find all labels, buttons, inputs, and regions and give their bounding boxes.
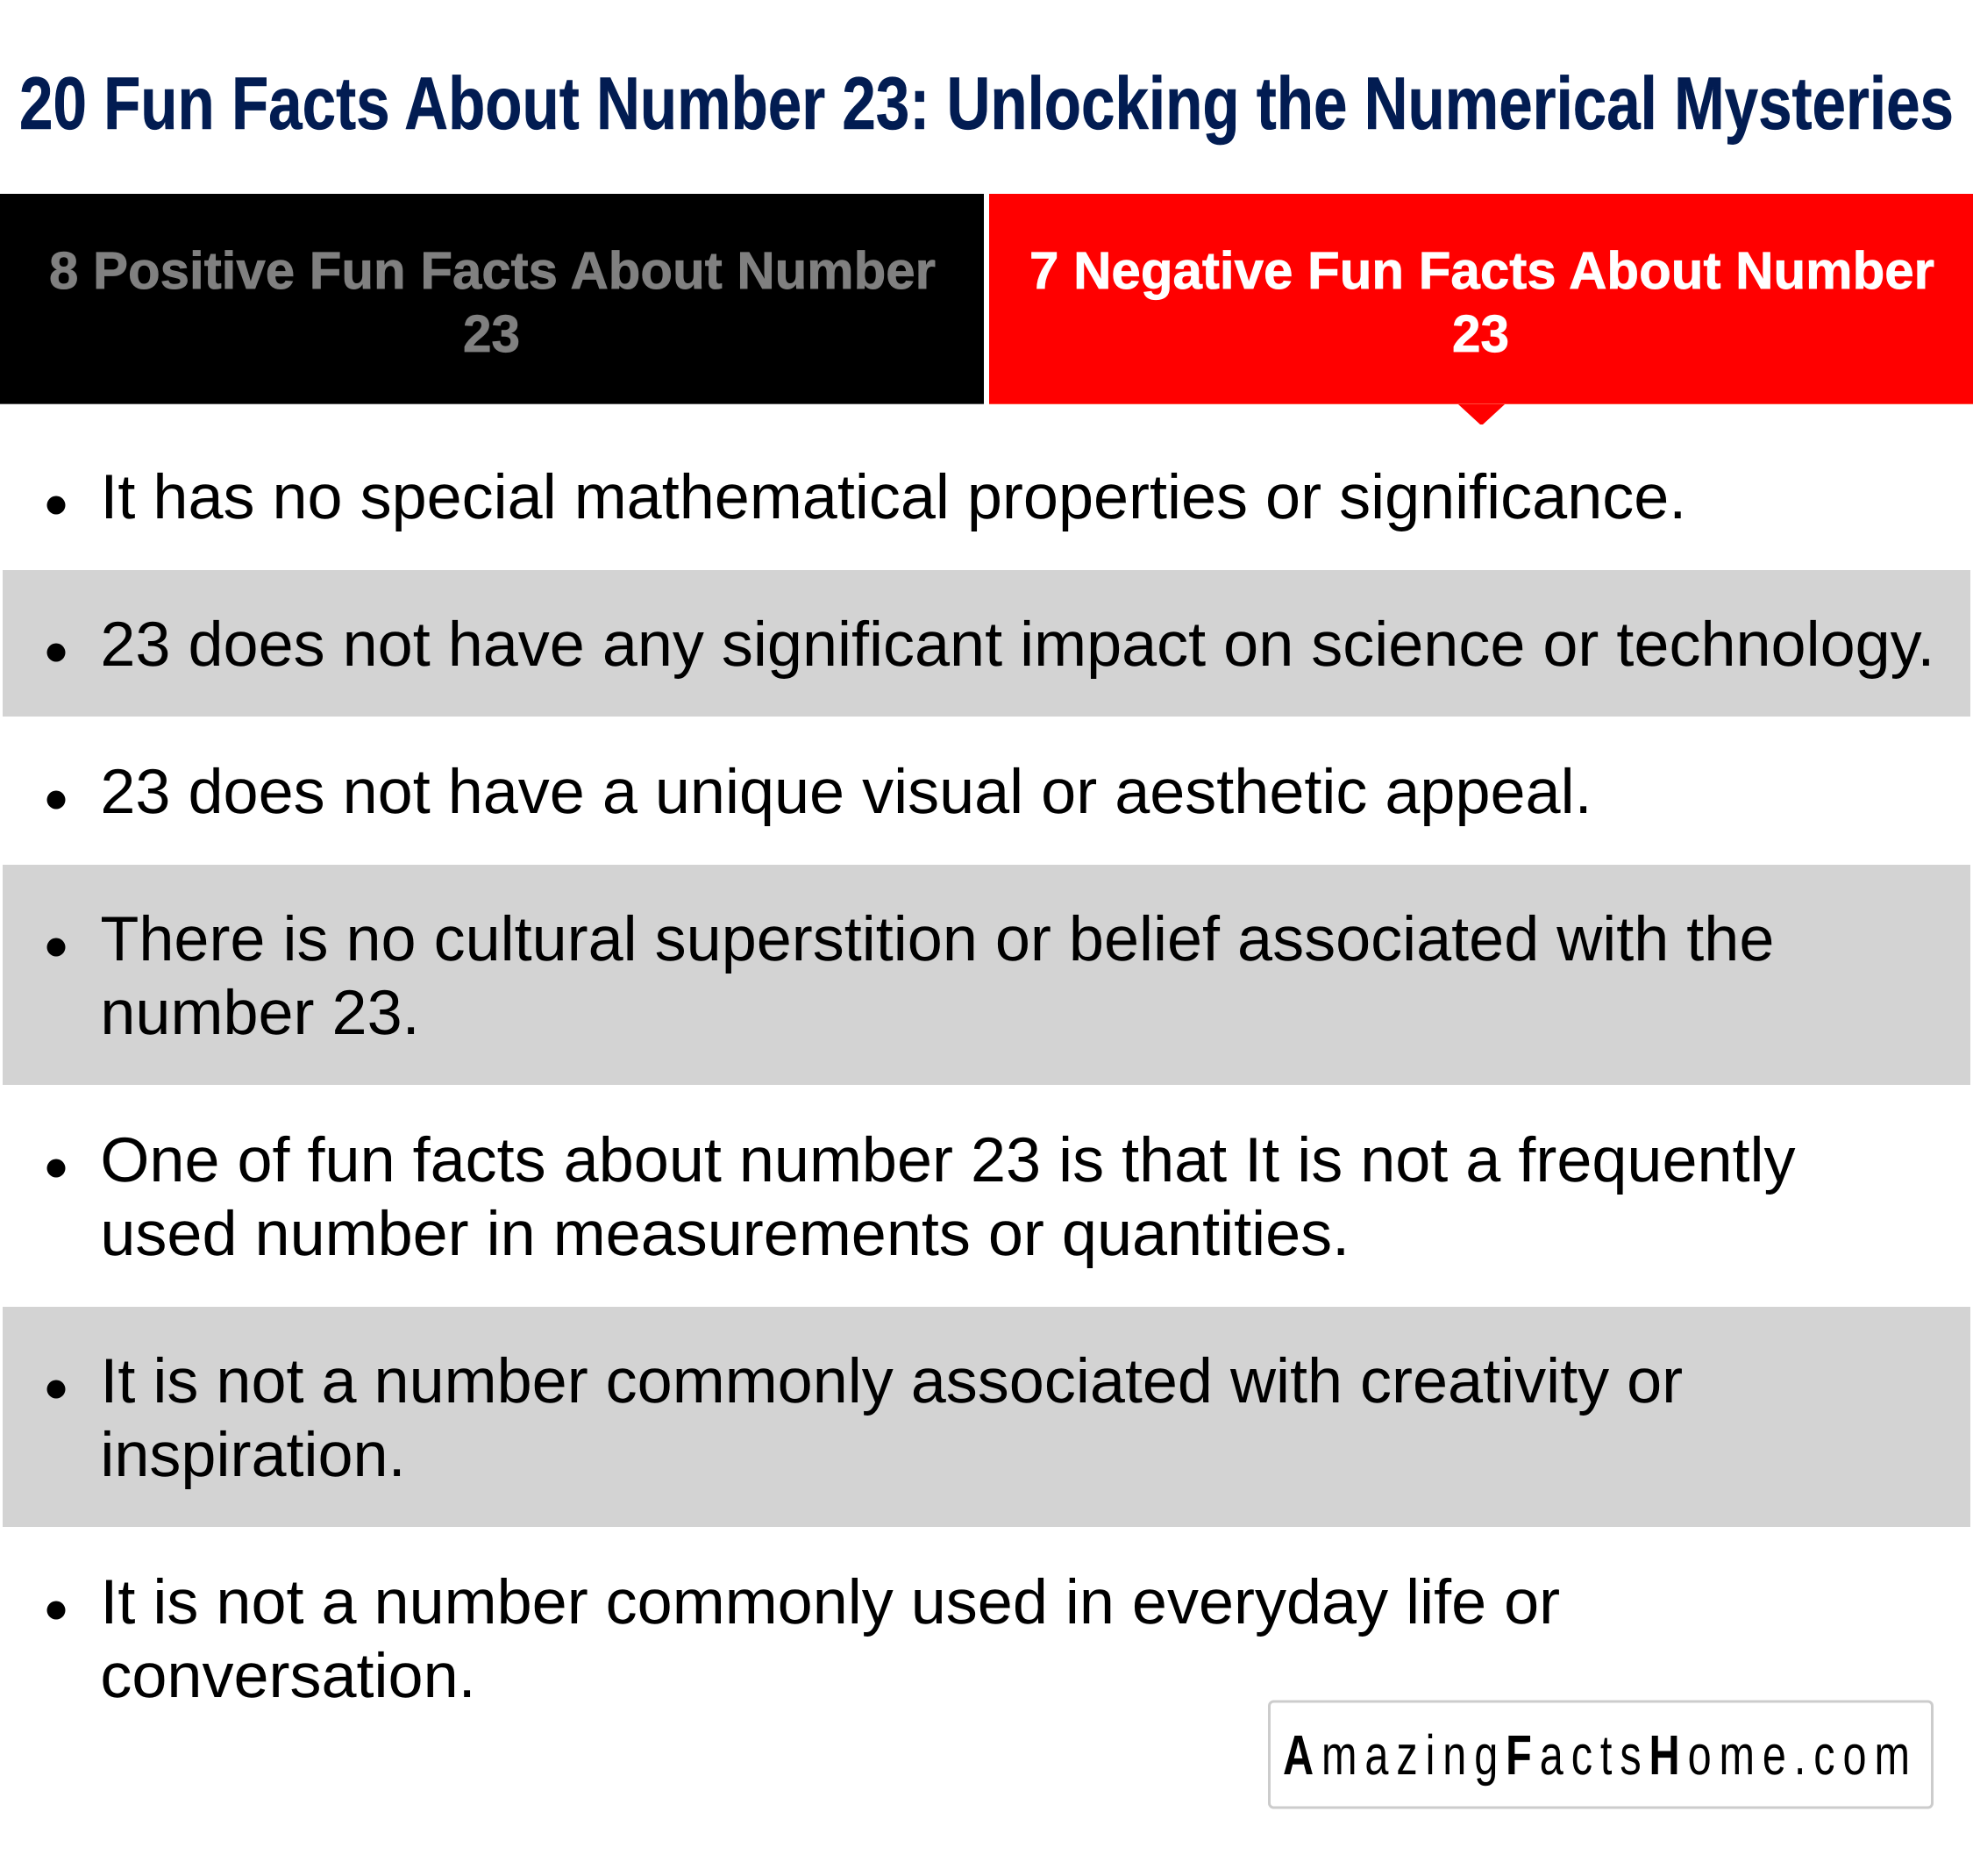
- row 2: 23 does not have any significant impact on science or technology.: [100, 610, 1934, 680]
- row 7: [47, 1567, 1560, 1711]
- row 5: One of fun facts about number 23 is that It is not a frequently: [100, 1125, 1796, 1195]
- row 6: It is not a number commonly associated with creativity or: [100, 1346, 1683, 1416]
- tab: positive facts: 8 Positive Fun Facts About Number: [49, 241, 936, 300]
- tab: positive facts: [0, 194, 984, 404]
- row 5: used number in measurements or quantities.: [100, 1199, 1350, 1269]
- row 4: There is no cultural superstition or belief associated with the: [100, 904, 1774, 974]
- tab: negative facts (active): 23: [1452, 304, 1509, 363]
- logo badge: [1270, 1701, 1933, 1808]
- row 7: conversation.: [100, 1641, 476, 1711]
- row 1: It has no special mathematical properties or significance.: [100, 462, 1686, 532]
- row 2: [3, 570, 1970, 717]
- logo badge: AmazingFactsHome.com: [1283, 1723, 1918, 1787]
- row 6: inspiration.: [100, 1420, 406, 1490]
- row 4: [3, 865, 1970, 1085]
- row 5: [47, 1125, 1796, 1269]
- row 6: [3, 1307, 1970, 1527]
- tab: negative facts (active): [989, 194, 1973, 424]
- tab: positive facts: 23: [463, 304, 520, 363]
- row 7: It is not a number commonly used in everyday life or: [100, 1567, 1560, 1637]
- row 4: number 23.: [100, 978, 420, 1048]
- tab: negative facts (active): 7 Negative Fun Facts About Number: [1029, 241, 1934, 300]
- row 3: 23 does not have a unique visual or aesthetic appeal.: [100, 757, 1592, 827]
